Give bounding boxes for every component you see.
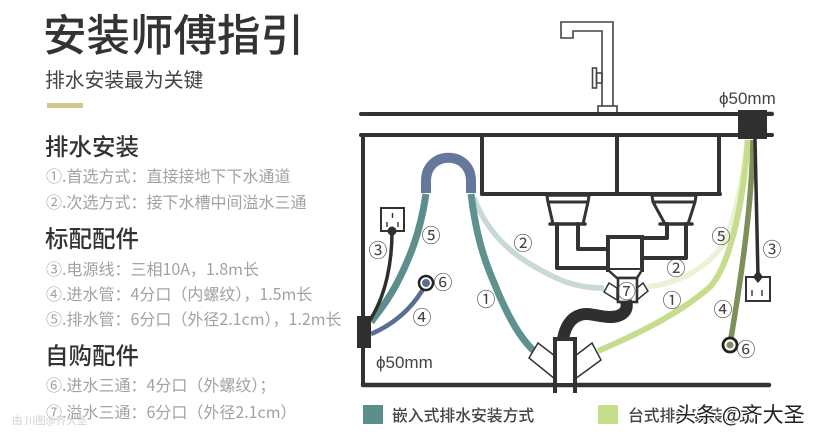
diagram number labels: ④: [713, 295, 733, 322]
diagram number labels: ④: [412, 303, 432, 330]
watermark: bottom left: 由 川图@齐大圣: [12, 413, 88, 428]
faucet: [561, 22, 617, 113]
section: drainage installation: [45, 128, 306, 213]
socket right: [746, 270, 770, 301]
accent bar: [47, 103, 83, 108]
strainer left: [547, 196, 589, 224]
section: drainage installation: 排水安装: [45, 128, 139, 162]
overflow tee wings: [604, 283, 648, 300]
corrugated hose: [563, 301, 627, 339]
section: standard parts: [45, 220, 342, 330]
diagram number labels: ⑦: [617, 277, 636, 304]
tube: right drain pale: [647, 140, 747, 287]
subtitle: 排水安装最为关键: [45, 64, 203, 93]
pipework: [557, 224, 686, 268]
valve right: [723, 338, 737, 352]
cable: power right: [755, 139, 758, 277]
section: self-purchased parts: [45, 337, 297, 423]
trap box: [608, 237, 642, 278]
floor drain wings: [529, 343, 601, 379]
tube: overflow route: [474, 198, 604, 288]
section: standard parts: ④.进水管：4分口（内螺纹），1.5m长: [46, 281, 312, 305]
section: standard parts: 标配配件: [45, 220, 139, 254]
valve left: [419, 276, 433, 290]
title: 安装师傅指引: [43, 1, 304, 64]
tube: right drain green: [598, 140, 748, 351]
tube: inlet right: [730, 140, 753, 344]
tube: left drain to wall: [371, 194, 426, 322]
cable: power left: [370, 232, 392, 320]
diagram number labels: ⑤: [421, 221, 441, 248]
section: standard parts: ③.电源线：三相10A，1.8m长: [46, 256, 259, 280]
countertop and cabinet frame: [361, 114, 772, 385]
diagram number labels: ⑥: [433, 268, 453, 295]
diagram number labels: ①: [662, 286, 682, 313]
legend: countertop installation: 台式排水安装方式: [628, 403, 755, 426]
section: self-purchased parts: 自购配件: [45, 337, 139, 371]
tube: left drain arch: [426, 158, 471, 193]
wall port left: [357, 316, 371, 348]
section: drainage installation: ①.首选方式：直接接地下下水通道: [46, 163, 290, 187]
diagram number labels: ③: [368, 236, 388, 263]
diameter label right: ϕ50mm: [719, 89, 776, 108]
sink: [482, 135, 720, 194]
legend: built-in installation: 嵌入式排水安装方式: [392, 403, 534, 426]
diagram number labels: ①: [476, 285, 496, 312]
section: self-purchased parts: ⑥.进水三通：4分口（外螺纹）；: [46, 372, 275, 396]
section: self-purchased parts: ⑦.溢水三通：6分口（外径2.1cm）: [46, 399, 297, 423]
tube: floor drain route: [471, 194, 534, 351]
tube: inlet left: [371, 284, 426, 334]
diameter label left: ϕ50mm: [376, 353, 433, 372]
overflow tee body: [618, 278, 637, 302]
strainer right: [652, 196, 696, 224]
watermark: bottom right: 头条 @齐大圣: [675, 399, 805, 429]
section: standard parts: ⑤.排水管：6分口（外径2.1cm），1.2m长: [46, 306, 342, 330]
diagram number labels: ②: [666, 254, 686, 281]
wall port right: [738, 110, 773, 139]
diagram number labels: [368, 221, 782, 362]
floor drain tee: [555, 339, 575, 393]
diagram number labels: ③: [762, 235, 782, 262]
diagram number labels: ②: [513, 229, 533, 256]
section: drainage installation: ②.次选方式：接下水槽中间溢水三通: [46, 189, 306, 213]
socket left: [381, 208, 404, 236]
diagram number labels: ⑤: [711, 222, 731, 249]
diagram number labels: ⑥: [736, 335, 756, 362]
